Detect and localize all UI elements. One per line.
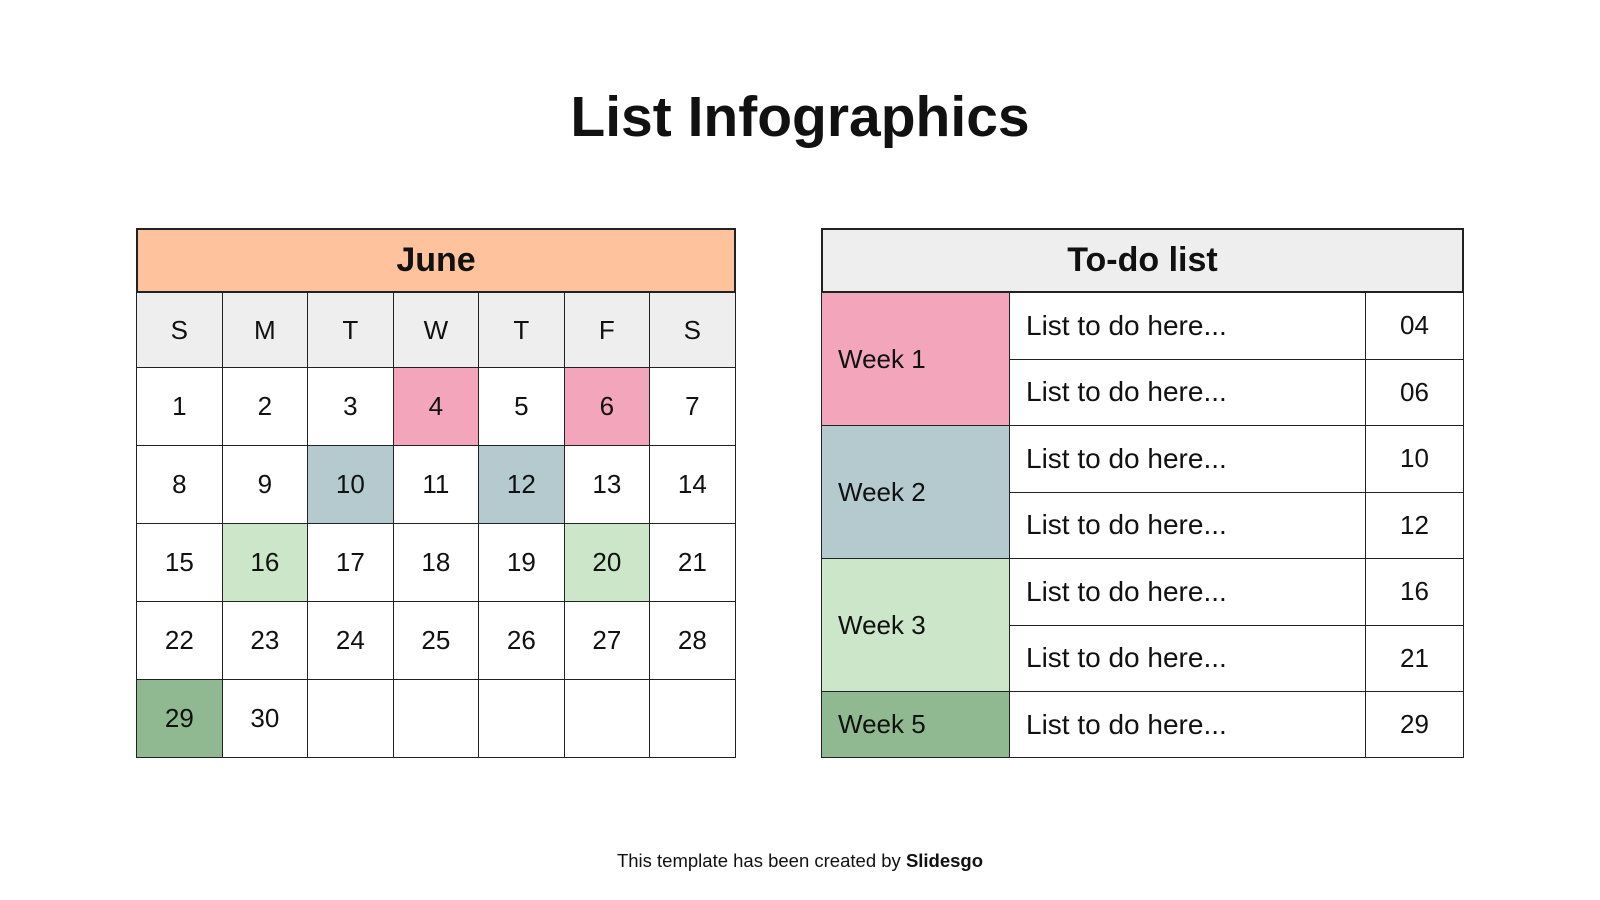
calendar header: June [136, 228, 736, 293]
date grid: 21 [678, 547, 707, 577]
panel: to-do list [821, 228, 1464, 758]
task rows: List to do here... [1026, 443, 1227, 474]
task rows: 12 [1400, 510, 1429, 540]
task rows: List to do here... [1026, 376, 1227, 407]
date grid: 28 [678, 625, 707, 655]
weekday row: W [424, 314, 448, 344]
week 2 [821, 425, 1010, 559]
date grid: 27 [592, 625, 621, 655]
week 1 [821, 292, 1010, 426]
task rows: List to do here... [1026, 576, 1227, 607]
date grid: 11 [422, 469, 449, 499]
date grid: 3 [343, 391, 358, 421]
date grid: 7 [685, 391, 700, 421]
weekday row: M [254, 314, 276, 344]
date grid: 30 [250, 703, 279, 733]
task rows: List to do here... [1026, 509, 1227, 540]
date grid: 1 [172, 391, 187, 421]
date grid: 5 [514, 391, 529, 421]
to-do header [821, 228, 1464, 293]
date grid: 29 [165, 703, 194, 733]
task rows: 04 [1400, 310, 1429, 340]
date grid: 19 [507, 547, 536, 577]
week 5: Week 5 [838, 709, 926, 739]
date grid: 9 [258, 469, 272, 499]
weekday row: T [342, 314, 358, 344]
date grid: 25 [421, 625, 450, 655]
task rows: 16 [1400, 576, 1429, 606]
date grid: 14 [678, 469, 707, 499]
date grid: 18 [421, 547, 450, 577]
date grid: 22 [165, 625, 194, 655]
week 3 [821, 558, 1010, 692]
task rows: 10 [1400, 443, 1429, 473]
date grid: 8 [172, 469, 187, 499]
date grid: 13 [592, 469, 621, 499]
task rows: List to do here... [1026, 642, 1227, 673]
date grid [136, 368, 736, 758]
to-do header: To-do list [1067, 241, 1218, 279]
week 1: Week 1 [838, 344, 926, 374]
date grid: 16 [250, 547, 279, 577]
calendar header: June: June [396, 241, 476, 279]
weekday row: S [684, 314, 701, 344]
date grid: 23 [250, 625, 279, 655]
date grid: 4 [429, 391, 443, 421]
date grid: 20 [592, 547, 621, 577]
week 5 [821, 691, 1010, 758]
task rows: List to do here... [1026, 708, 1227, 740]
weekday row [136, 293, 736, 367]
task rows: 29 [1400, 709, 1429, 739]
footer credit: This template has been created by Slidesgo [617, 850, 983, 871]
task rows [1010, 293, 1464, 758]
title: List Infographics [570, 85, 1030, 149]
date grid: 2 [258, 391, 272, 421]
date grid: 10 [336, 469, 365, 499]
date grid: 6 [600, 391, 614, 421]
week 2: Week 2 [838, 476, 926, 506]
weekday row: S [171, 314, 188, 344]
week 3: Week 3 [838, 610, 926, 640]
date grid: 15 [165, 547, 194, 577]
panel: calendar [136, 228, 736, 758]
date grid: 17 [336, 547, 365, 577]
date grid: 26 [507, 625, 536, 655]
task rows: List to do here... [1026, 310, 1227, 341]
weekday row: T [513, 314, 529, 344]
date grid: 24 [336, 625, 365, 655]
weekday row: F [599, 314, 615, 344]
task rows: 06 [1400, 377, 1429, 407]
task rows: 21 [1400, 643, 1429, 673]
date grid: 12 [507, 469, 536, 499]
